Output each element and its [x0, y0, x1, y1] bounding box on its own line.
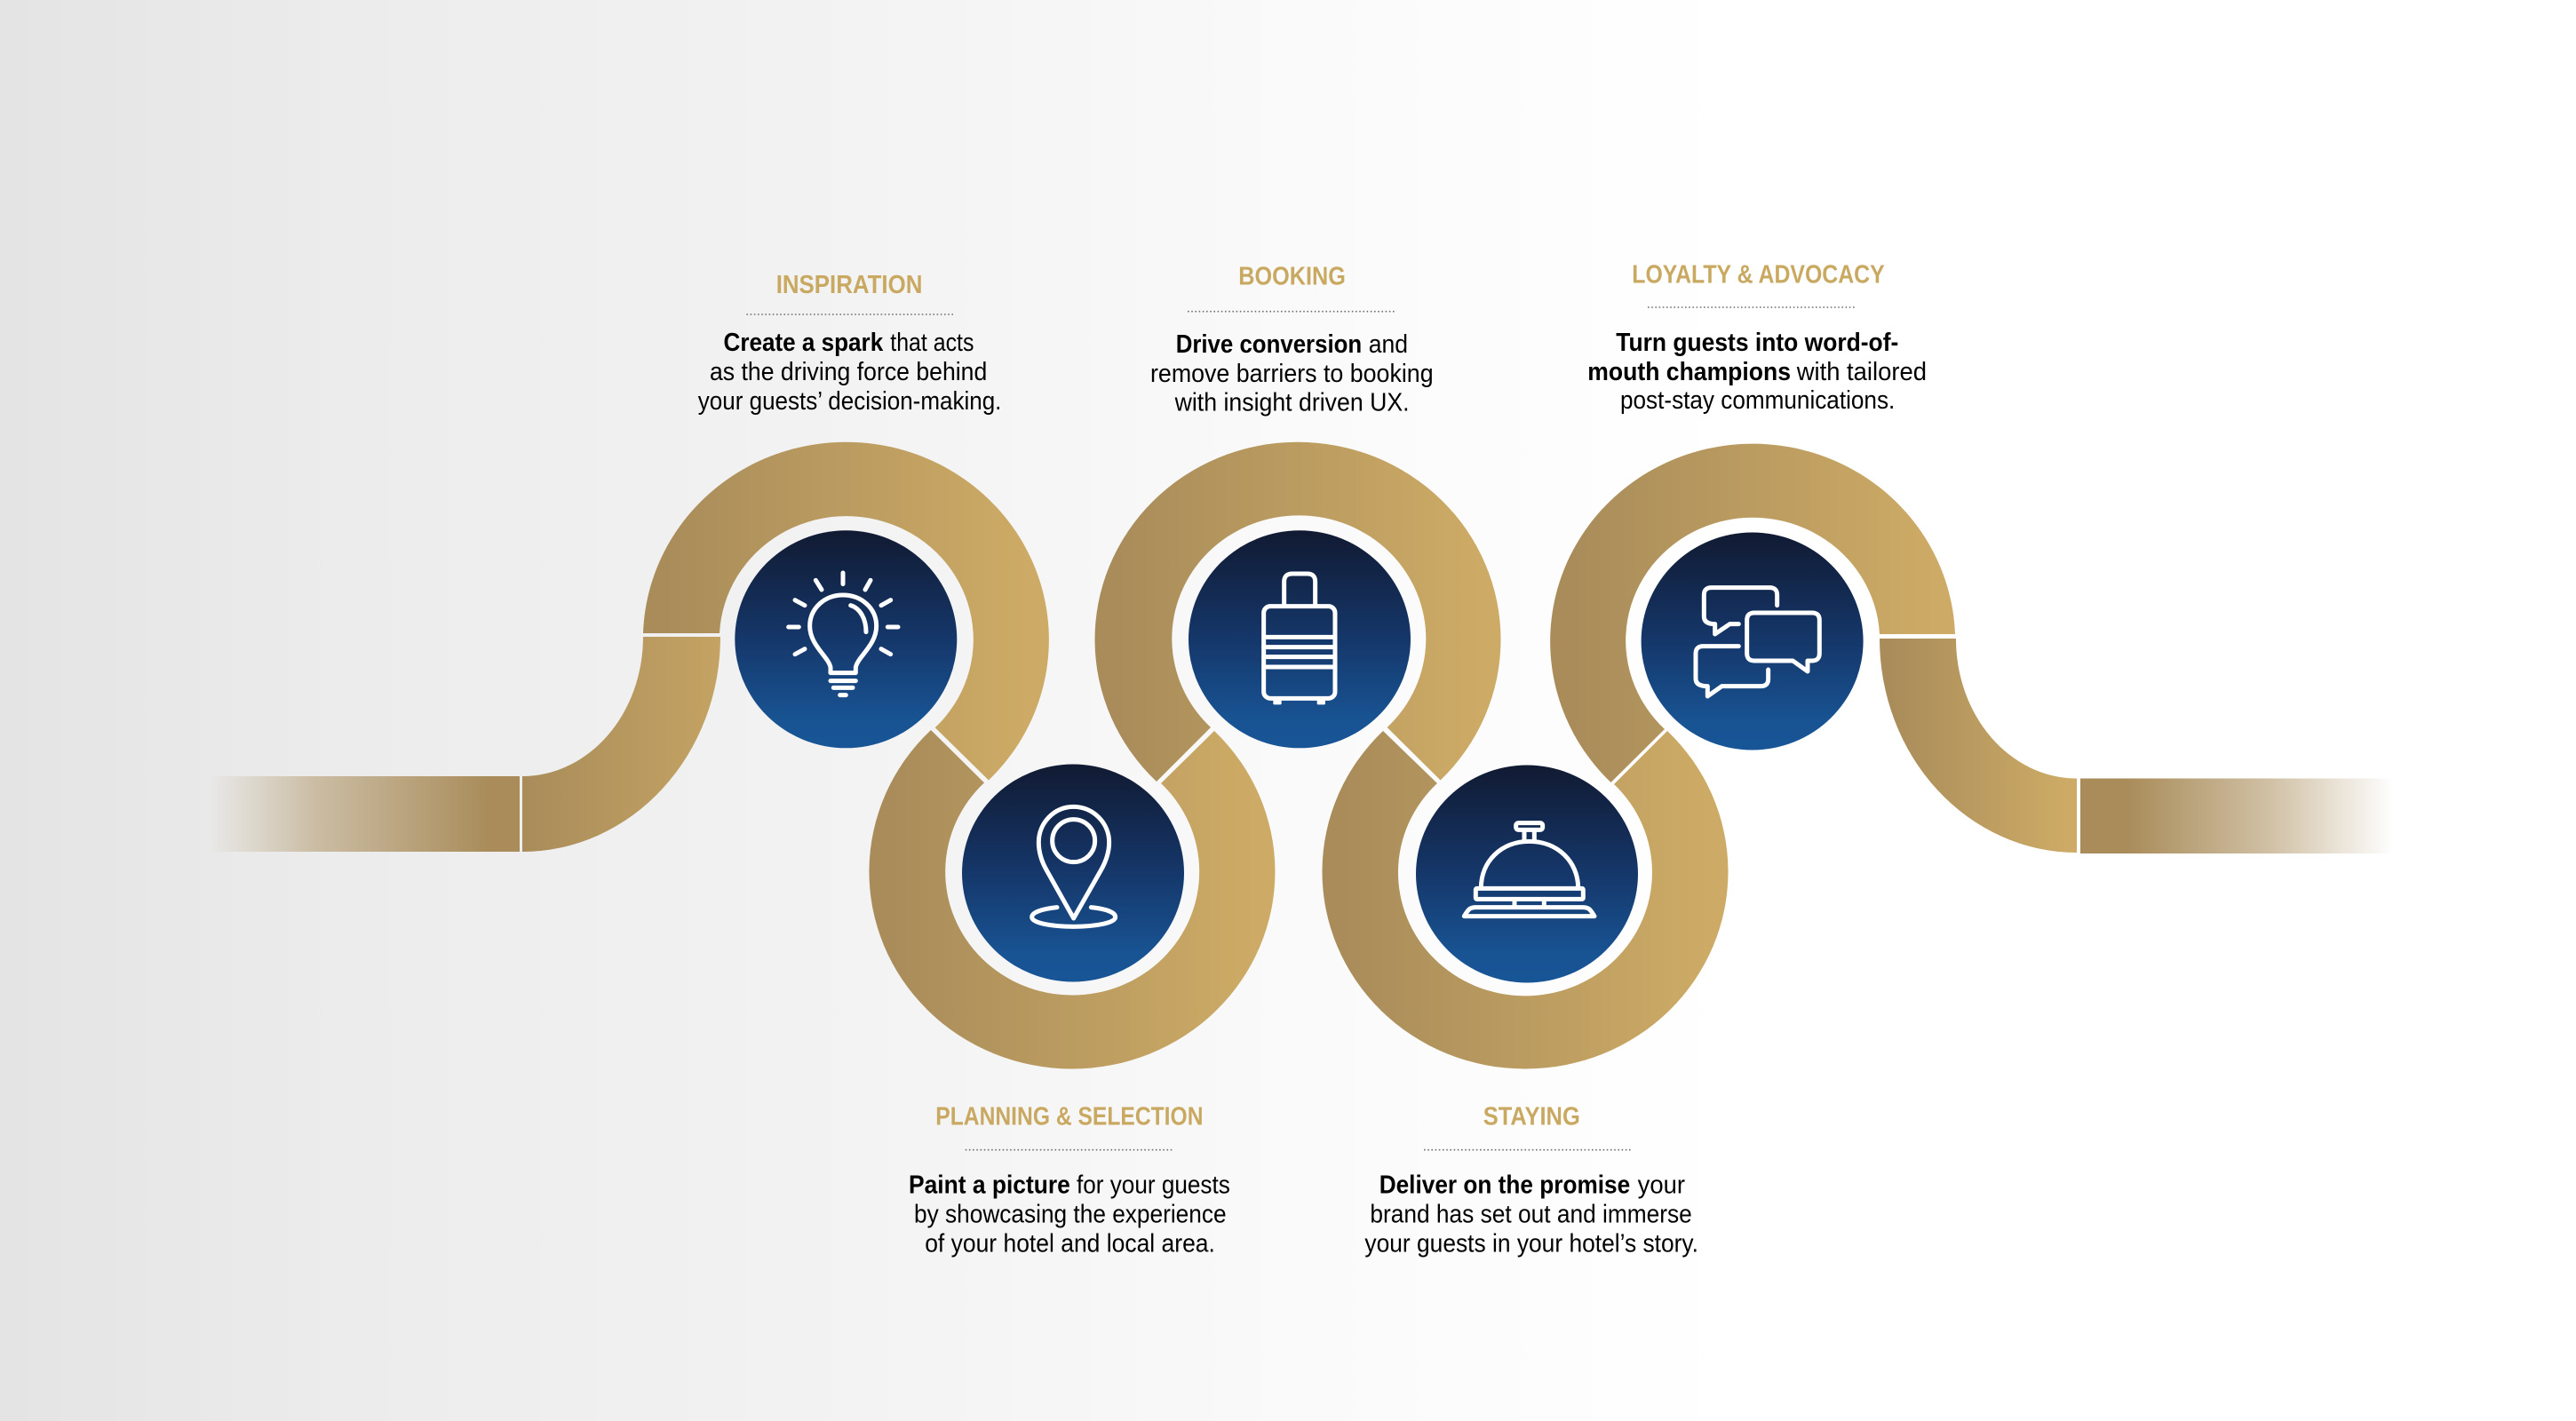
gold ring: staying: [1322, 731, 1728, 1068]
stage: inspiration: [643, 271, 1049, 780]
lead-out curved segment: [1880, 639, 2077, 853]
stage: staying: [1322, 731, 1728, 1258]
description: planning: by showcasing the experience: [914, 1201, 1227, 1229]
description: planning: [909, 1171, 1230, 1258]
description: loyalty: mouth champions: [1587, 358, 1791, 386]
description: planning: Paint a picture: [909, 1171, 1070, 1199]
description: inspiration: that acts: [890, 329, 974, 357]
description: staying: your: [1638, 1171, 1685, 1199]
description: inspiration: as the driving force behind: [710, 358, 987, 386]
description: planning: for your guests: [1077, 1171, 1230, 1199]
heading: loyalty: LOYALTY & ADVOCACY: [1632, 260, 1885, 289]
stage: loyalty and advocacy: [1550, 260, 1955, 782]
heading: planning: PLANNING & SELECTION: [935, 1103, 1203, 1131]
description: booking: and: [1369, 330, 1408, 359]
description: booking: [1150, 330, 1434, 417]
description: loyalty: Turn guests into word-of-: [1616, 329, 1898, 357]
gold ring: booking: [1095, 442, 1501, 782]
heading: inspiration: INSPIRATION: [776, 271, 922, 299]
badge circle: booking: [1189, 530, 1411, 748]
description: loyalty: [1587, 329, 1927, 415]
heading: booking: BOOKING: [1238, 263, 1346, 291]
heading: staying: STAYING: [1483, 1103, 1580, 1131]
lead-in curved segment: [522, 637, 720, 852]
gold ring: inspiration: [643, 442, 1049, 780]
description: staying: your guests in your hotel’s story.: [1364, 1229, 1698, 1258]
description: inspiration: [698, 329, 1001, 416]
stage: planning and selection: [869, 730, 1275, 1258]
icon: light bulb: [789, 573, 898, 695]
badge circle: loyalty: [1642, 533, 1864, 750]
icon: suitcase: [1264, 574, 1335, 704]
stage: booking: [1095, 263, 1501, 782]
description: booking: Drive conversion: [1176, 330, 1362, 359]
description: staying: [1364, 1171, 1698, 1258]
icon: service bell: [1464, 823, 1594, 917]
gold ring: loyalty: [1550, 444, 1955, 782]
description: booking: remove barriers to booking: [1150, 360, 1434, 388]
description: loyalty: with tailored: [1796, 358, 1927, 386]
lead-out fading bar: [2080, 778, 2394, 853]
lead-in fading bar: [209, 776, 520, 852]
description: loyalty: post-stay communications.: [1620, 386, 1895, 415]
icon: speech bubbles: [1696, 588, 1819, 696]
badge circle: inspiration: [735, 530, 957, 748]
gold ring: planning: [869, 730, 1275, 1068]
description: booking: with insight driven UX.: [1174, 389, 1410, 417]
description: staying: Deliver on the promise: [1379, 1171, 1630, 1199]
badge circle: planning: [962, 764, 1184, 982]
description: staying: brand has set out and immerse: [1370, 1201, 1692, 1229]
description: inspiration: Create a spark: [723, 329, 884, 357]
description: inspiration: your guests’ decision-making.: [698, 387, 1001, 416]
description: planning: of your hotel and local area.: [925, 1229, 1215, 1258]
badge circle: staying: [1416, 766, 1638, 982]
icon: map pin: [1032, 806, 1116, 926]
